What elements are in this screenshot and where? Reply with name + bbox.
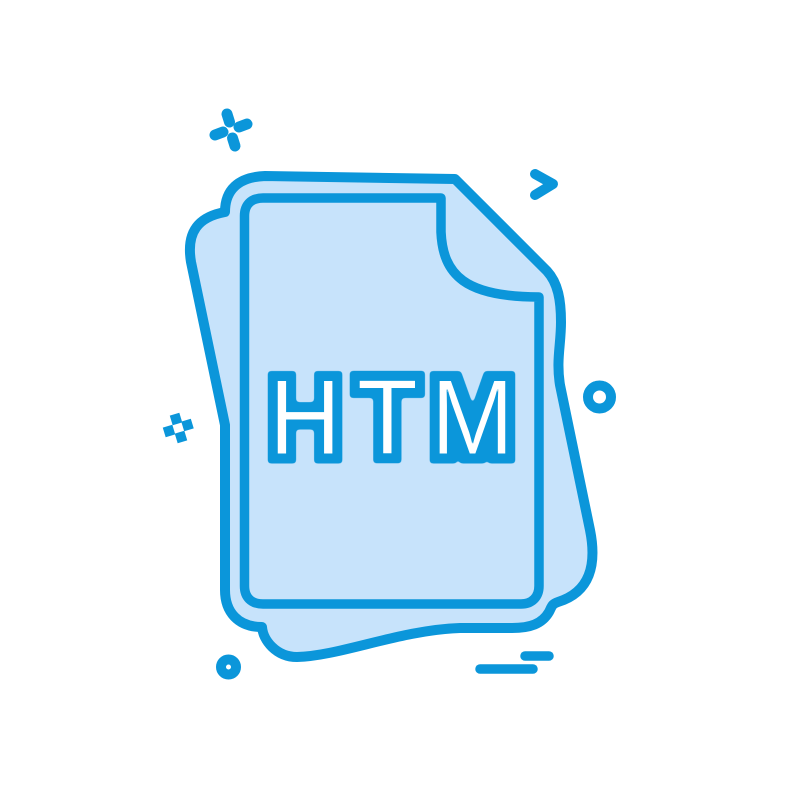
icon: ring right xyxy=(588,386,611,408)
icon: four-petal sparkle xyxy=(215,114,247,146)
icon: diamond cluster xyxy=(163,413,194,443)
front page of the file with folded corner xyxy=(244,198,539,604)
file type label: HTM: M xyxy=(431,357,514,477)
file type label: HTM xyxy=(269,357,514,477)
icon: ring bottom left xyxy=(221,660,236,674)
icon: chevron xyxy=(535,174,553,195)
file type label: HTM: H xyxy=(269,357,341,477)
file type label: HTM: T xyxy=(357,357,418,477)
back sheet of the file xyxy=(190,176,592,657)
icon: speed lines xyxy=(480,656,549,669)
